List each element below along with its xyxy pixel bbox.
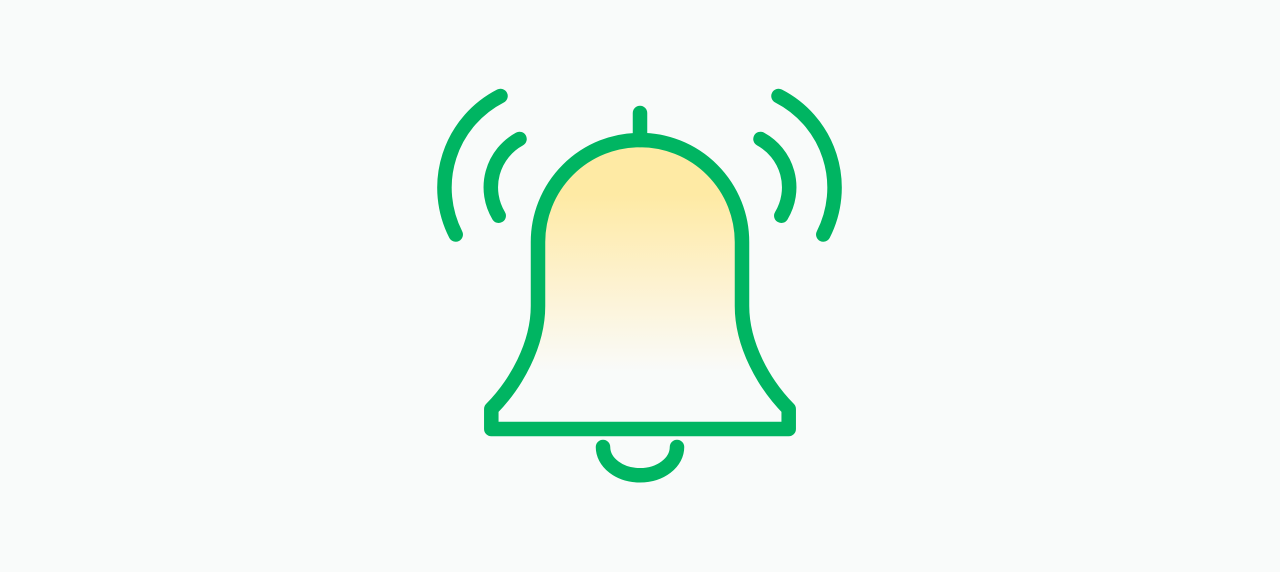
left sound waves: [444, 96, 520, 234]
bell clapper: [603, 447, 677, 475]
right sound waves: [760, 96, 835, 234]
bell body: [491, 140, 789, 429]
bell top stem: [633, 113, 647, 140]
